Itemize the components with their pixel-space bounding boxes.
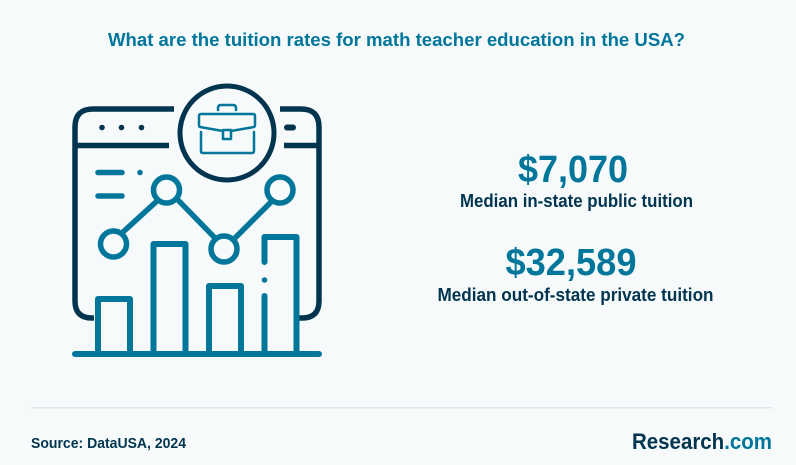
browser window frame xyxy=(75,109,319,318)
source note: Source: DataUSA, 2024 xyxy=(31,436,186,452)
logo: Research.com xyxy=(632,429,772,454)
stat: in-state value: $7,070 xyxy=(518,149,628,191)
stat: out-of-state value: $32,589 xyxy=(506,242,636,284)
title: What are the tuition rates for math teacher education in the USA? xyxy=(108,29,685,50)
stat: in-state label: Median in-state public tuition xyxy=(460,191,693,211)
line chart xyxy=(100,177,293,262)
bar chart xyxy=(98,237,296,352)
stat: out-of-state label: Median out-of-state private tuition xyxy=(438,285,714,305)
text lines and dot xyxy=(98,172,122,196)
briefcase badge circle xyxy=(180,86,274,180)
icon: browser window with chart and briefcase xyxy=(75,86,319,354)
icon: briefcase xyxy=(199,105,255,153)
baseline xyxy=(75,351,319,357)
window dots xyxy=(99,125,144,130)
